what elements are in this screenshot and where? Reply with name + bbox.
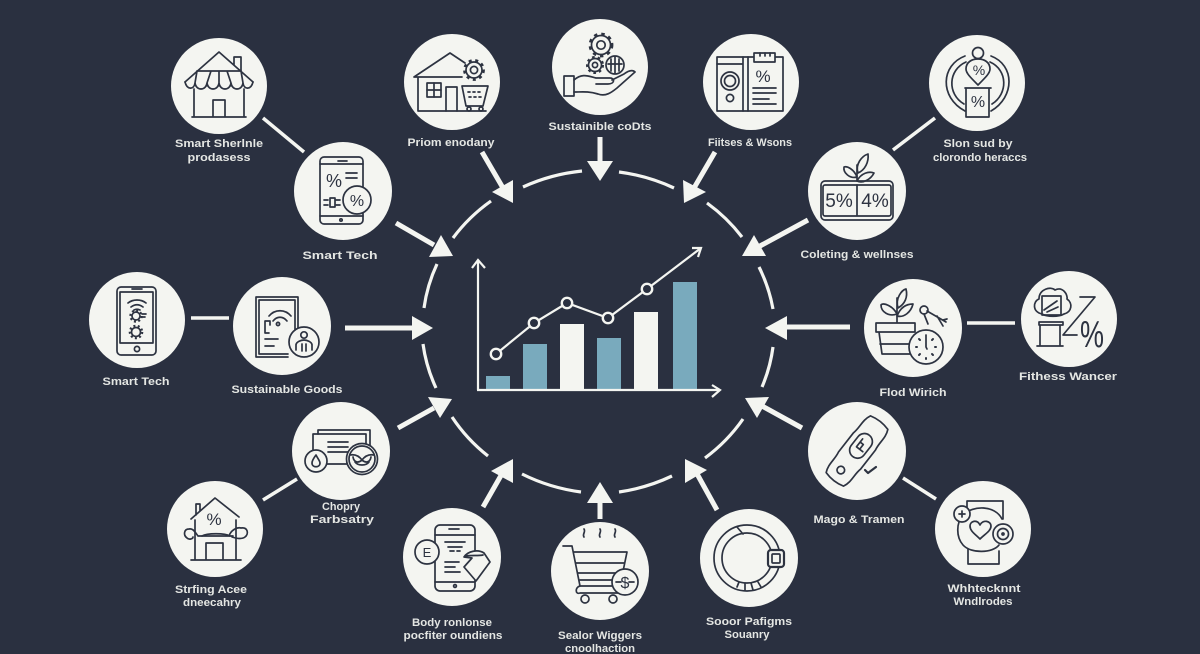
label: smartwatch heart (948, 583, 1021, 608)
label: fitness percent: Fithess Wancer (1019, 371, 1118, 383)
icon: phone with percent: % (326, 171, 342, 191)
icon: receipt percent: % (755, 67, 771, 86)
label: house with percent: dneecahry (183, 597, 242, 609)
label: house and cart: Priom enodany (408, 137, 495, 149)
dashed ring around the chart (423, 171, 773, 492)
label: receipt: Fiitses & Wsons (708, 137, 792, 149)
icon: percent pin and cup (946, 48, 1009, 117)
node: house with percent (167, 481, 263, 609)
node: receipt (703, 34, 799, 149)
label: smart tech: Smart Tech (302, 250, 378, 262)
label: shopping cart: Sealor Wiggers (558, 630, 642, 642)
icon: plant tray 5% 4%: 4% (861, 191, 889, 212)
node: fitness percent (1019, 271, 1118, 383)
node: ring (700, 509, 798, 641)
label: house with percent: Strfing Acee (175, 584, 247, 596)
label: percent cup: clorondo heraccs (933, 152, 1027, 164)
label: store: prodasess (188, 152, 250, 164)
label: ring: Sooor Pafigms (706, 616, 792, 628)
label: percent cup (933, 138, 1027, 164)
central growth chart (472, 248, 720, 397)
connector lines between outer and inner nodes (191, 118, 1015, 500)
node: smart phone with wifi (89, 272, 185, 388)
icon: house cart gear (414, 53, 488, 111)
label: percent cup: Slon sud by (944, 138, 1013, 150)
icon: house percent: % (206, 510, 222, 529)
node: store (171, 38, 267, 164)
label: store: Smart Sherlnle (175, 138, 263, 150)
label: ring (706, 616, 792, 641)
icon: store (185, 52, 253, 117)
icon: plant tray 5% 4%: 5% (825, 191, 853, 212)
label: phone shopping: Body ronlonse (412, 617, 492, 629)
node: house and cart (404, 34, 500, 149)
node: card with badges (292, 402, 390, 526)
label: sustainable goods: Sustainable Goods (232, 384, 342, 396)
icon: hand gears (564, 34, 635, 96)
icon: smartwatch with heart (954, 501, 1013, 564)
node: percent cup (929, 35, 1027, 164)
icon: card with drop and badge (305, 430, 378, 474)
label: store (175, 138, 263, 164)
label: plant and clock: Flod Wirich (880, 387, 947, 399)
label: wearable band: Mago & Tramen (814, 514, 905, 526)
icon: cart with dollar: $ (621, 575, 630, 592)
node: plant and clock (864, 279, 962, 399)
label: smartwatch heart: Wndlrodes (954, 596, 1012, 608)
label: card with badges: Chopry (322, 501, 361, 513)
icon: smart ring (714, 525, 784, 591)
label: ring: Souanry (724, 629, 770, 641)
icon: phone with percent: % (350, 193, 364, 210)
node: hand with gears (548, 19, 652, 133)
label: hand with gears: Sustainible coDts (548, 121, 652, 133)
node: wearable band (808, 402, 906, 526)
label: phone shopping: pocfiter oundiens (404, 630, 502, 642)
icon: fitness band (823, 413, 891, 489)
label: plant with percentages: Coleting & wellnses (800, 249, 914, 261)
icon: phone with percent (320, 157, 371, 224)
label: card with badges (310, 501, 375, 526)
icon: percent pin and cup: % (973, 62, 985, 78)
label: house with percent (175, 584, 247, 609)
node: sustainable goods (232, 277, 342, 396)
icon: potted tree with percent: % (1080, 314, 1104, 356)
icon: document with wifi and person (256, 297, 319, 357)
node: shopping cart (551, 522, 649, 654)
label: card with badges: Farbsatry (310, 514, 375, 526)
icon: phone wifi gears (117, 287, 156, 355)
icon: percent pin and cup: % (971, 94, 985, 111)
icon: phone with tag: E (423, 545, 432, 560)
label: phone shopping (404, 617, 502, 642)
icon: plant pot clock (876, 289, 947, 364)
inward arrows (345, 137, 850, 519)
node: plant with percentages (800, 142, 914, 261)
label: smart tech: Smart Tech (102, 376, 170, 388)
label: smartwatch heart: Whhtecknnt (948, 583, 1021, 595)
node: phone shopping (403, 508, 502, 642)
node: smart tech phone (294, 142, 392, 262)
label: shopping cart (558, 630, 642, 654)
icon: plant tray 5% 4% (821, 154, 893, 220)
node: smartwatch heart (935, 481, 1031, 608)
